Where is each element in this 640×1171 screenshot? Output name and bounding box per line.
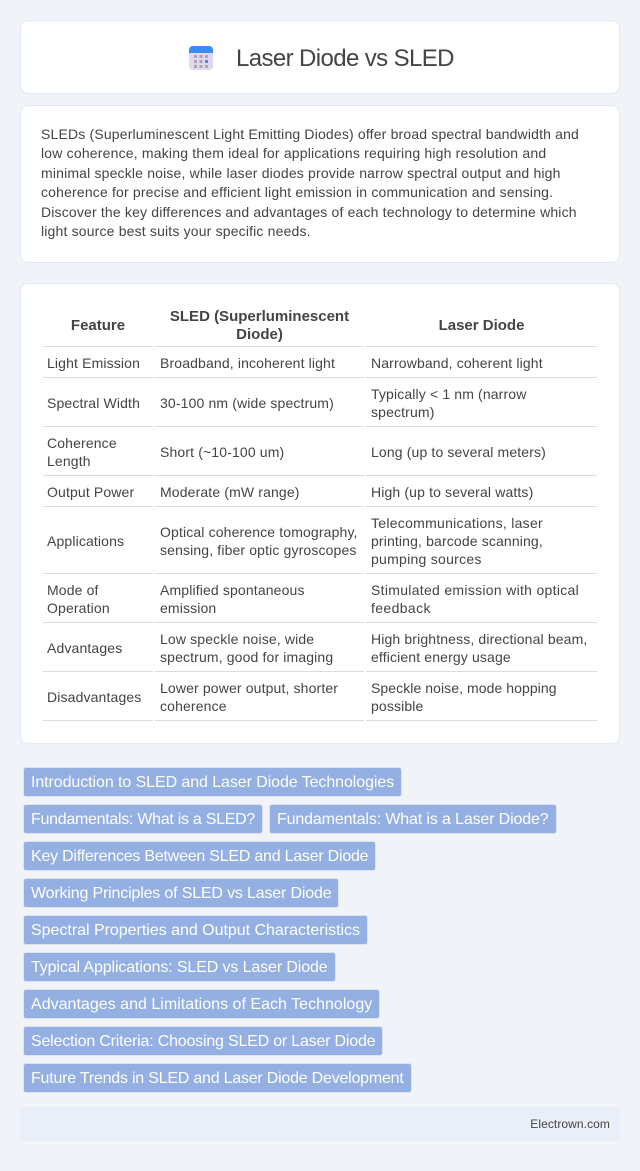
row: mode of operation	[47, 582, 579, 616]
row: advantages: spectrum, good for imaging	[160, 649, 333, 665]
row: mode of operation: feedback	[371, 600, 431, 616]
row: mode of operation: Operation	[47, 600, 110, 616]
row: output power: High (up to several watts)	[371, 484, 533, 500]
tag	[269, 804, 557, 834]
row: advantages: Advantages	[47, 640, 122, 656]
intro text: low coherence, making them ideal for applications requiring high resolution and	[41, 145, 546, 161]
row: applications: Telecommunications, laser	[371, 515, 543, 531]
footer	[20, 1107, 620, 1141]
tag	[23, 878, 339, 908]
intro card	[20, 105, 620, 263]
tag: Key Differences Between SLED and Laser Diode	[31, 848, 368, 865]
row: disadvantages: Speckle noise, mode hopping	[371, 680, 557, 696]
tag	[23, 915, 368, 945]
row: disadvantages: possible	[371, 698, 424, 714]
table card	[20, 283, 620, 744]
intro text: coherence for precise and efficient light emission in communication and sensing.	[41, 184, 553, 200]
table header: Feature	[71, 317, 125, 334]
row: coherence length: Short (~10-100 um)	[160, 444, 284, 460]
row: disadvantages: Lower power output, shorter	[160, 680, 338, 696]
intro text	[41, 126, 579, 239]
tag: Spectral Properties and Output Characteristics	[31, 922, 360, 939]
title: Laser Diode vs SLED	[236, 45, 454, 72]
row: output power	[47, 484, 533, 500]
row: mode of operation: emission	[160, 600, 216, 616]
row: light emission: Narrowband, coherent light	[371, 355, 543, 371]
tag: Typical Applications: SLED vs Laser Diode	[31, 959, 328, 976]
row: advantages: High brightness, directional beam,	[371, 631, 587, 647]
row: applications: sensing, fiber optic gyroscopes	[160, 542, 357, 558]
row: mode of operation: Mode of	[47, 582, 99, 598]
tag	[23, 767, 402, 797]
tag: Fundamentals: What is a Laser Diode?	[277, 811, 549, 828]
tag	[23, 804, 263, 834]
row: light emission: Broadband, incoherent light	[160, 355, 335, 371]
tag: Advantages and Limitations of Each Technology	[31, 996, 372, 1013]
row: applications: Optical coherence tomography,	[160, 524, 358, 540]
row: light emission: Light Emission	[47, 355, 140, 371]
row: applications	[47, 515, 543, 567]
row: output power: Moderate (mW range)	[160, 484, 300, 500]
table header: Laser Diode	[439, 317, 524, 334]
row: spectral width: Spectral Width	[47, 395, 140, 411]
row: advantages	[47, 631, 587, 665]
tag: Selection Criteria: Choosing SLED or Laser Diode	[31, 1033, 375, 1050]
row: mode of operation: Stimulated emission with optical	[371, 582, 579, 598]
row: applications: pumping sources	[371, 551, 482, 567]
row: applications: printing, barcode scanning,	[371, 533, 543, 549]
intro text: minimal speckle noise, while laser diodes provide narrow spectral output and high	[41, 165, 561, 181]
header card	[20, 20, 620, 94]
icon: calendar	[189, 46, 213, 70]
row: mode of operation: Amplified spontaneous	[160, 582, 305, 598]
row: coherence length	[47, 435, 546, 469]
row: spectral width: Typically < 1 nm (narrow	[371, 386, 526, 402]
row: coherence length: Coherence	[47, 435, 117, 451]
topic tags	[23, 767, 557, 1093]
row: disadvantages	[47, 680, 557, 714]
row: light emission	[47, 355, 543, 371]
footer credit: Electrown.com	[530, 1117, 610, 1131]
tag: Introduction to SLED and Laser Diode Technologies	[31, 774, 394, 791]
row: disadvantages: Disadvantages	[47, 689, 141, 705]
row: applications: Applications	[47, 533, 124, 549]
tag: Fundamentals: What is a SLED?	[31, 811, 255, 828]
intro text: light source best suits your specific needs.	[41, 223, 311, 239]
row: disadvantages: coherence	[160, 698, 227, 714]
row: spectral width: spectrum)	[371, 404, 434, 420]
comparison table	[43, 308, 597, 721]
tag	[23, 841, 376, 871]
row: advantages: efficient energy usage	[371, 649, 511, 665]
tag	[23, 952, 336, 982]
tag	[23, 1063, 412, 1093]
tag	[23, 1026, 383, 1056]
row: output power: Output Power	[47, 484, 134, 500]
tag	[23, 989, 380, 1019]
table header	[71, 308, 524, 343]
table header: Diode)	[236, 326, 283, 343]
row: spectral width	[47, 386, 526, 420]
table header: SLED (Superluminescent	[170, 308, 349, 325]
row: coherence length: Long (up to several meters)	[371, 444, 546, 460]
row: coherence length: Length	[47, 453, 91, 469]
intro text: Discover the key differences and advantages of each technology to determine which	[41, 204, 577, 220]
tag: Working Principles of SLED vs Laser Diode	[31, 885, 331, 902]
tag: Future Trends in SLED and Laser Diode Development	[31, 1070, 404, 1087]
row: spectral width: 30-100 nm (wide spectrum)	[160, 395, 334, 411]
row: advantages: Low speckle noise, wide	[160, 631, 314, 647]
intro text: SLEDs (Superluminescent Light Emitting Diodes) offer broad spectral bandwidth and	[41, 126, 579, 142]
